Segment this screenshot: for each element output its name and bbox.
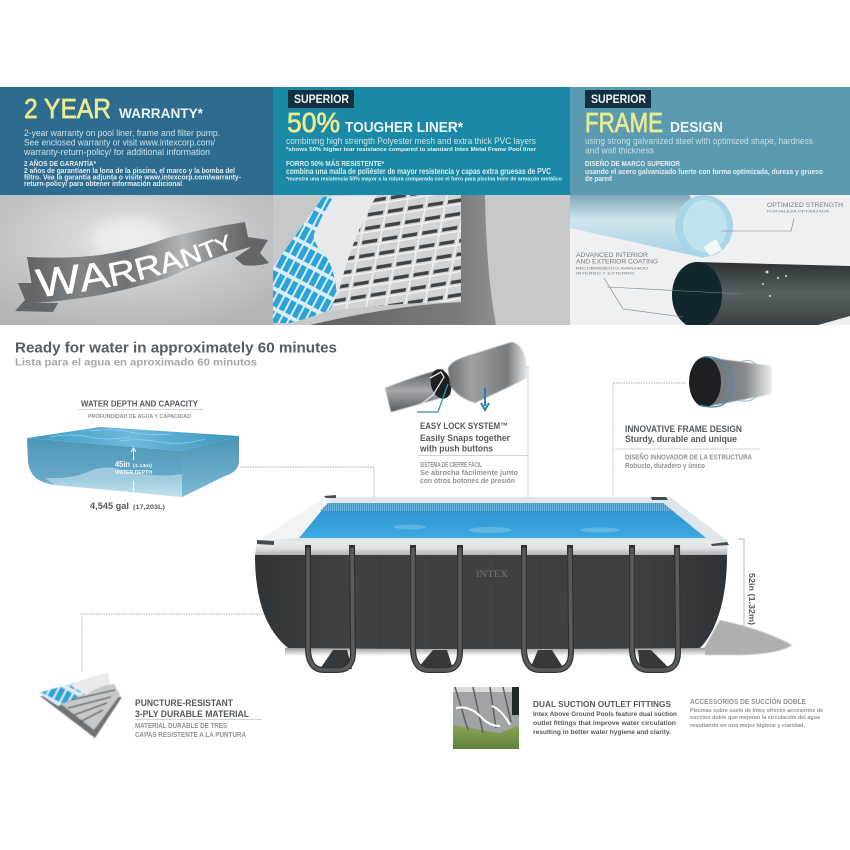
text: frame spanish <box>585 159 823 183</box>
ribbon tails <box>15 237 269 312</box>
text: dual spanish: resultando en una mejor higiene y claridad. <box>690 723 805 729</box>
text: easy lock spanish <box>420 460 518 485</box>
text: innovative english: Sturdy, durable and unique <box>625 434 737 444</box>
label: optimized strength: FORTALEZA OPTIMIZADA <box>767 208 829 214</box>
mesh layer <box>330 195 461 311</box>
text: puncture spanish: MATERIAL DURABLE DE TRES <box>135 723 227 730</box>
upper tube <box>570 195 733 258</box>
pool legs dark edge <box>308 545 678 670</box>
text: frame spanish: de pared <box>585 174 612 183</box>
badge: superior <box>288 90 354 108</box>
icon: 3-ply material <box>38 673 122 738</box>
pool rim top <box>258 497 728 541</box>
text: dual english: DUAL SUCTION OUTLET FITTINGS <box>533 700 672 709</box>
text: innovative spanish <box>625 452 752 470</box>
ribbon banner <box>27 222 250 303</box>
depth label: WATER DEPTH <box>115 470 152 476</box>
heading: 2 year warranty: WARRANTY* <box>119 105 204 121</box>
heading: ready for water <box>15 340 337 368</box>
image: liner layers <box>273 195 570 325</box>
capacity: 4,545 gal <box>90 501 129 512</box>
white flap <box>314 195 377 300</box>
blue tile layer <box>273 196 337 323</box>
leader lines <box>604 219 794 317</box>
text: warranty spanish: filtro. Vea la garantía adjunta o visite www.intexcorp.com/warranty- <box>24 172 241 182</box>
icon: frame tube <box>689 357 772 407</box>
label: advanced coating: AND EXTERIOR COATING <box>576 260 658 266</box>
text: easy lock english <box>419 421 510 454</box>
label: advanced coating: INTERNO Y EXTERNO <box>576 270 634 276</box>
water volume block <box>27 427 239 497</box>
text: easy lock english: Easily Snaps together <box>420 433 510 443</box>
badge: superior frame: SUPERIOR <box>591 94 647 106</box>
badge: superior frame <box>585 90 651 108</box>
capacity <box>90 501 165 512</box>
panel: tougher liner <box>273 87 570 195</box>
rim corners <box>257 495 729 546</box>
text: warranty spanish: 2 años de garantíaen la lona de la piscina, el marco y la bomba del <box>24 166 235 175</box>
label: water depth title <box>78 400 203 420</box>
panel: warranty <box>0 87 273 195</box>
label: optimized strength: OPTIMIZED STRENGTH <box>767 203 843 209</box>
ground shadow <box>700 620 792 655</box>
text: innovative english: INNOVATIVE FRAME DESIGN <box>625 424 742 434</box>
capacity: (17,203L) <box>133 504 165 511</box>
text: frame spanish: usando el acero galvanizado fuerte con forma optimizada, dureza y grueso <box>585 167 823 176</box>
label: water depth title: PROFUNDIDAD DE AGUA Y CAPACIDAD <box>88 414 191 420</box>
text: puncture spanish <box>135 723 246 739</box>
callout: dual suction outlet fittings <box>453 687 823 749</box>
text: dual english: outlet fittings that improve water circulation <box>533 720 676 727</box>
text: liner english: *shows 50% higher tear resistance compared to standard Intex Metal Frame Pool liner <box>286 147 537 153</box>
text: easy lock english: EASY LOCK SYSTEM™ <box>420 421 508 431</box>
pool legs highlight <box>308 548 678 670</box>
callout: easy lock system <box>385 342 528 485</box>
text: liner english: combining high strength Polyester mesh and extra thick PVC layers <box>286 136 536 146</box>
depth label: 45in <box>115 459 130 469</box>
pool wall <box>255 555 727 649</box>
depth label <box>115 448 153 492</box>
callout: puncture resistant <box>38 673 262 739</box>
heading: 2 year warranty <box>24 93 204 124</box>
wall fold lines <box>380 556 655 648</box>
label: water depth title: WATER DEPTH AND CAPACITY <box>81 400 199 408</box>
icon: easy lock tubes <box>385 342 527 412</box>
text: warranty spanish <box>24 159 241 188</box>
text: innovative spanish: DISEÑO INNOVADOR DE LA ESTRUCTURA <box>625 452 752 462</box>
heading: 50% tougher liner: 50% <box>287 107 340 138</box>
heading: 50% tougher liner <box>287 107 463 138</box>
text: liner english <box>286 136 537 153</box>
text: warranty spanish: 2 AÑOS DE GARANTÍA* <box>24 159 96 168</box>
text: innovative spanish: Robusto, duradero y único <box>625 463 705 470</box>
brand mark: INTEX <box>476 569 509 579</box>
text: puncture english: 3-PLY DURABLE MATERIAL <box>135 709 249 719</box>
connector lines <box>82 367 685 672</box>
callout: water depth and capacity <box>27 400 239 512</box>
heading: frame design: DESIGN <box>670 119 723 136</box>
photo: pool on grass <box>453 687 519 749</box>
text: puncture english <box>135 698 249 719</box>
text: warranty english <box>23 128 220 158</box>
label: advanced coating: RECUBRIMIENTO AVANZADO <box>576 266 648 270</box>
text: easy lock spanish: Se abrocha fácilmente junto <box>420 470 518 477</box>
pool illustration <box>255 495 792 670</box>
text: innovative english <box>625 424 742 444</box>
dimension: pool height: 52in (1.32m) <box>747 573 757 625</box>
label: advanced coating: ADVANCED INTERIOR <box>576 253 649 259</box>
text: dual spanish: Piscinas sobre suelo de Intex ofrecen accesorios de <box>690 708 823 714</box>
text: dual spanish <box>690 697 823 729</box>
badge: superior: SUPERIOR <box>294 94 350 106</box>
text: dual english: resulting in better water hygiene and clarity. <box>533 729 671 736</box>
text: liner spanish: *muestra una resistencia 50% mayor a la rotura comparada con el forro para piscina Intex de armazón metálico <box>286 176 562 182</box>
heading: ready for water: Ready for water in approximately 60 minutes <box>15 340 337 356</box>
text: frame spanish: DISEÑO DE MARCO SUPERIOR <box>585 159 680 168</box>
water surface <box>299 503 706 538</box>
text: puncture spanish: CAPAS RESISTENTE A LA PUNTURA <box>135 732 246 739</box>
text: easy lock english: with push buttons <box>419 444 493 454</box>
text: warranty spanish: return-policy/ para obtener información adicional <box>24 179 182 188</box>
callout: innovative frame design <box>615 357 772 470</box>
label: optimized strength <box>767 203 843 214</box>
depth label: (1.14m) <box>133 463 153 468</box>
text: warranty english: 2-year warranty on pool liner, frame and filter pump. <box>24 128 220 139</box>
text: warranty english: warranty-return-policy/ for additional information <box>23 147 210 158</box>
text: easy lock spanish: con otros botones de presión <box>420 478 515 485</box>
image: warranty ribbon <box>0 195 273 325</box>
label: advanced coating <box>576 253 658 276</box>
text: liner spanish: combina una malla de poliéster de mayor resistencia y capas extra gruesas de PVC <box>286 167 551 176</box>
front rim <box>255 541 728 555</box>
text: frame english: using strong galvanized steel with optimized shape, hardness <box>585 136 813 146</box>
ribbon label: WARRANTY <box>34 234 228 296</box>
text: dual english: Intex Above Ground Pools feature dual suction <box>533 711 677 718</box>
text: puncture english: PUNCTURE-RESISTANT <box>135 698 233 708</box>
text: warranty english: See enclosed warranty or visit www.intexcorp.com/ <box>24 138 215 148</box>
text: frame english: and wall thickness <box>585 146 654 156</box>
heading: ready for water: Lista para el agua en aproximado 60 minutos <box>15 356 257 368</box>
lower tube <box>665 262 850 331</box>
text: easy lock spanish: SISTEMA DE CIERRE FÁCIL <box>420 460 482 469</box>
image: frame tubes <box>570 195 850 331</box>
dimension: pool height <box>738 539 757 650</box>
text: dual spanish: ACCESSORIOS DE SUCCIÓN DOBLE <box>690 697 806 706</box>
text: frame english <box>585 136 813 156</box>
text: liner spanish <box>286 159 562 182</box>
pool feet <box>320 650 670 669</box>
heading: frame design: FRAME <box>585 107 663 138</box>
heading: 50% tougher liner: TOUGHER LINER* <box>345 119 463 136</box>
gray base sheet <box>310 195 496 325</box>
text: liner spanish: FORRO 50% MÁS RESISTENTE* <box>286 159 384 168</box>
text: dual spanish: succión doble que mejoran la circulación del agua <box>690 715 821 721</box>
panel: frame design <box>570 87 850 195</box>
heading: 2 year warranty: 2 YEAR <box>24 93 111 124</box>
text: dual english <box>533 700 677 736</box>
